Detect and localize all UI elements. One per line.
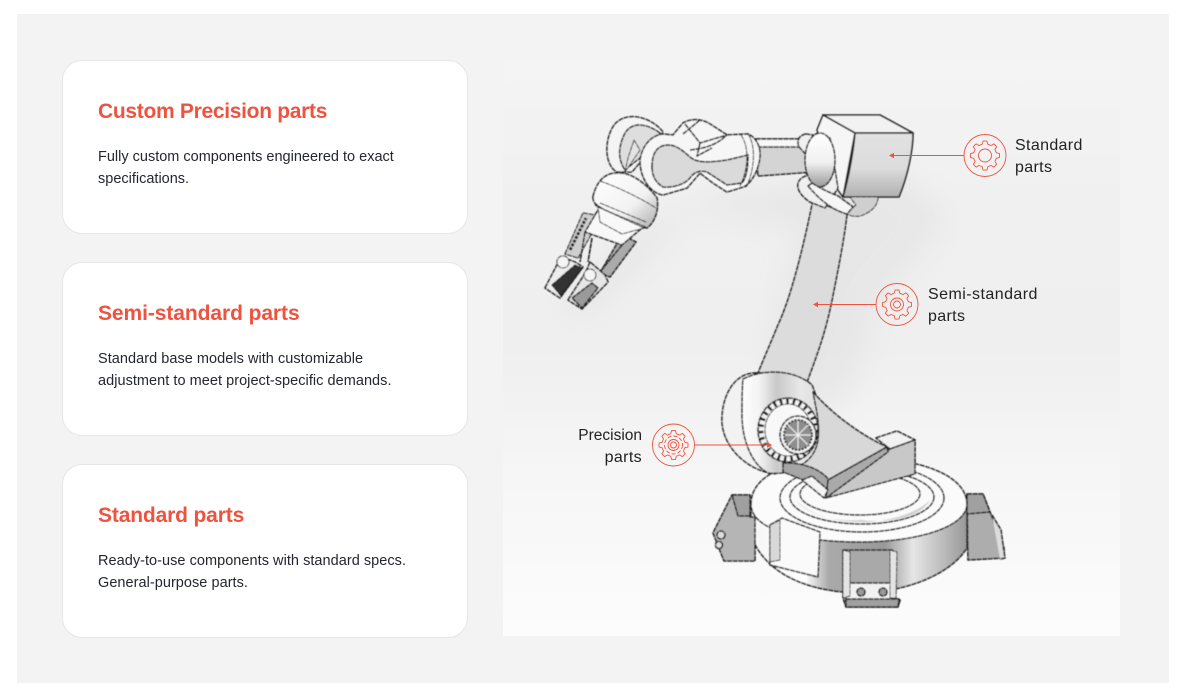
text: semi-standard description — [98, 351, 392, 388]
panel: semi-standard parts — [62, 262, 468, 436]
heading: custom precision parts: Custom Precision parts — [98, 100, 327, 123]
gripper — [545, 210, 643, 309]
horizontal forearm — [756, 139, 814, 176]
side pocket — [770, 518, 820, 577]
panel: custom precision parts — [62, 60, 468, 234]
panel: standard parts — [62, 464, 468, 638]
front foot — [843, 550, 900, 607]
text: custom precision description: Fully custom components engineered to exact — [98, 149, 394, 165]
mounting block — [802, 431, 915, 498]
gear hub — [758, 398, 818, 462]
robot arm — [545, 115, 1005, 607]
icon: standard gear — [964, 134, 1006, 176]
callout: semi-standard parts: parts — [928, 308, 965, 325]
soft shadows — [560, 170, 950, 420]
image backdrop — [503, 60, 1120, 636]
right foot — [967, 494, 1005, 560]
icon: precision gear — [652, 424, 694, 466]
text: semi-standard description: Standard base models with customizable — [98, 351, 363, 367]
heading: semi-standard parts: Semi-standard parts — [98, 302, 300, 325]
long arm — [757, 200, 847, 382]
text: standard description: Ready-to-use components with standard specs. — [98, 553, 406, 569]
icon: semi-standard gear — [876, 284, 918, 326]
dogbone link — [640, 120, 760, 195]
label: semi-standard parts: Semi-standard — [928, 286, 1038, 303]
arrow: semi-standard parts — [813, 302, 876, 307]
lower link — [783, 392, 887, 493]
wrist disc — [607, 117, 663, 172]
heading: standard parts: Standard parts — [98, 504, 244, 527]
callout: standard parts — [889, 134, 1083, 176]
callout: standard parts: parts — [1015, 159, 1052, 176]
text: custom precision description — [98, 149, 394, 186]
callout: precision parts — [578, 424, 772, 466]
text: standard description — [98, 553, 406, 590]
text: semi-standard description: adjustment to meet project-specific demands. — [98, 372, 392, 388]
callout: semi-standard parts — [813, 284, 1038, 326]
top gearbox — [817, 115, 913, 197]
shoulder base joint — [722, 372, 825, 474]
label: precision parts: Precision — [578, 427, 642, 444]
arrow: precision parts — [694, 442, 772, 448]
shoulder joint — [798, 133, 878, 216]
callout: precision parts: parts — [605, 449, 642, 466]
left foot — [713, 495, 755, 561]
text: custom precision description: specifications. — [98, 170, 189, 186]
arrow: standard parts — [889, 153, 964, 158]
text: standard description: General-purpose parts. — [98, 574, 248, 590]
label: standard parts: Standard — [1015, 137, 1083, 154]
wrist dome — [593, 140, 658, 234]
base ring — [751, 458, 967, 593]
